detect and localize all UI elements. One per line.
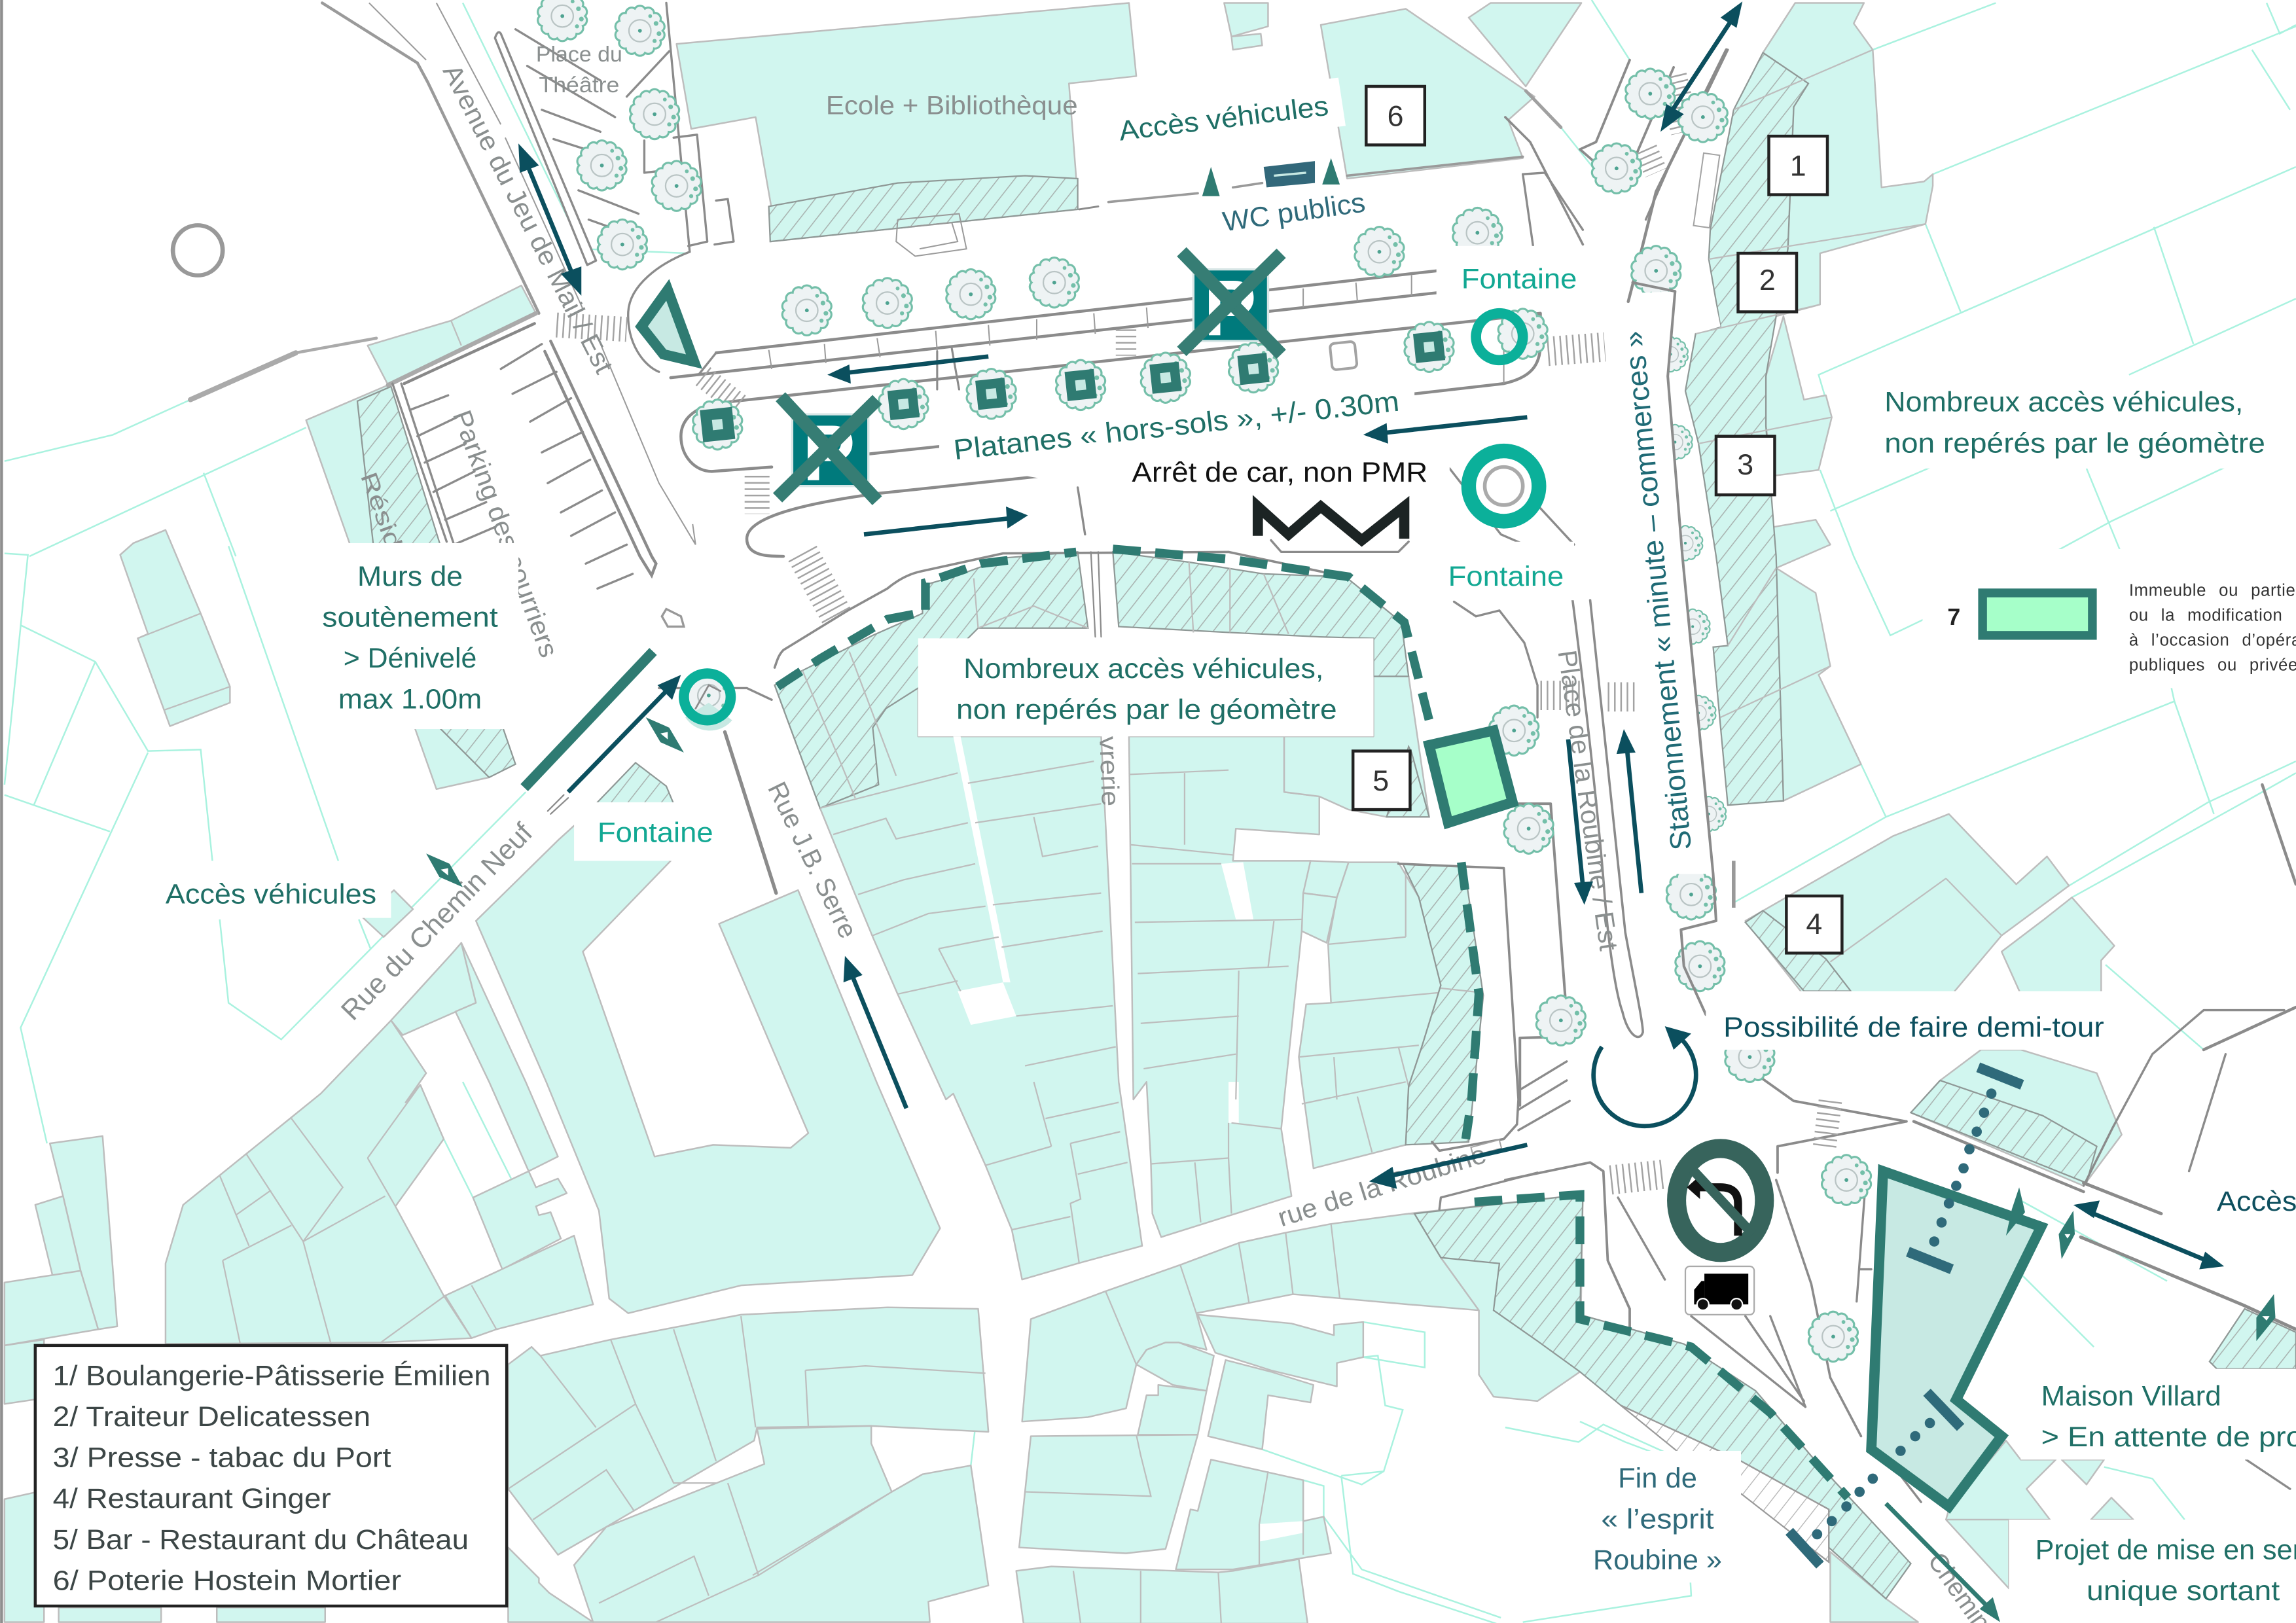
label: fin de l'esprit Roubine — [1593, 1463, 1722, 1576]
label: platanes: Platanes « hors-sols », +/- 0.30m — [952, 386, 1401, 466]
label: maison villard: Maison Villard — [2041, 1382, 2221, 1412]
label: WC publics: WC publics — [1221, 187, 1367, 238]
label: fontaine north: Fontaine — [1462, 264, 1577, 295]
label: fontaine centre: Fontaine — [1448, 562, 1564, 592]
buildings: north block — [368, 3, 1581, 385]
bus stop zigzag — [1258, 507, 1404, 540]
label: nombreux accès centre: Nombreux accès véhicules, — [963, 654, 1323, 685]
label: nombreux accès centre — [956, 654, 1337, 725]
immeuble 5 marker — [1429, 730, 1513, 823]
label: nombreux accès centre: non repérés par le géomètre — [956, 694, 1337, 725]
label: accès véhicules north: Accès véhicules — [1117, 91, 1330, 147]
no left turn sign with truck panel — [1665, 1136, 1776, 1315]
legend: commerces: 1/ Boulangerie-Pâtisserie Émilien — [53, 1361, 491, 1391]
street names: rue de la Roubine — [1274, 1139, 1490, 1232]
street names: Place de la Roubine / Est — [1552, 648, 1623, 952]
label: nombreux accès east: non repérés par le géomètre — [1884, 428, 2265, 459]
label: fin de l'esprit Roubine: Roubine » — [1593, 1545, 1722, 1576]
number badge 6 — [1366, 86, 1425, 145]
label: fin de l'esprit Roubine: « l’esprit — [1601, 1504, 1714, 1535]
label: fontaine west: Fontaine — [598, 817, 713, 848]
legend: commerces: 6/ Poterie Hostein Mortier — [53, 1565, 401, 1596]
retaining wall — [524, 651, 653, 788]
street names — [336, 43, 1997, 1623]
number badge 2 — [1738, 253, 1797, 312]
number badge 5: 5 — [1372, 764, 1389, 797]
buildings: south of rue de la Roubine — [1016, 1050, 2296, 1623]
number badge 5 — [1353, 751, 1410, 810]
trees — [538, 0, 1871, 1362]
parking sign north, crossed out: P — [1204, 264, 1257, 352]
legend: commerces: 4/ Restaurant Ginger — [53, 1484, 331, 1514]
planter squares — [700, 331, 1445, 442]
legend item 7: 7 — [1947, 604, 1960, 630]
label: murs de soutènement: max 1.00m — [338, 685, 482, 715]
western shield shape — [641, 290, 694, 362]
label: murs de soutènement — [322, 562, 498, 715]
legend: commerces — [35, 1346, 507, 1606]
number badge 2: 2 — [1759, 264, 1776, 296]
fountain rings — [684, 313, 1539, 730]
label: accès véhicules west: Accès véhicules — [166, 879, 376, 910]
street names: Rue J.B. Serre — [762, 777, 863, 943]
number badge 1 — [1769, 136, 1827, 195]
label: murs de soutènement: > Dénivelé — [344, 643, 476, 674]
street names: Ecole + Bibliothèque — [826, 90, 1078, 120]
label: projet de mise en sens unique: unique sortant — [2087, 1576, 2280, 1607]
WC block — [1264, 161, 1315, 187]
parking sign south, crossed out: P — [802, 409, 855, 497]
street names: vrerie — [1094, 736, 1124, 807]
street names: Rue du Chemin Neuf — [336, 817, 539, 1026]
label: fin de l'esprit Roubine: Fin de — [1618, 1463, 1697, 1494]
label: arrêt de car: Arrêt de car, non PMR — [1132, 457, 1427, 488]
number badge 3 — [1716, 437, 1774, 495]
label: nombreux accès east: Nombreux accès véhicules, — [1884, 387, 2243, 418]
number badge 1: 1 — [1790, 149, 1806, 182]
buildings: west — [5, 385, 988, 1622]
legend: commerces: 3/ Presse - tabac du Port — [53, 1443, 391, 1474]
buildings: central blocks — [775, 552, 1483, 1279]
street names: Parking des courriers — [447, 406, 564, 661]
label: projet de mise en sens unique — [2036, 1535, 2296, 1607]
legend item 7 — [1947, 581, 2296, 675]
buildings: east strip — [1685, 3, 2114, 1010]
parking sign south, crossed out — [778, 397, 877, 501]
number badge 6: 6 — [1388, 99, 1404, 132]
dotted section lines — [1789, 1067, 2022, 1565]
label: maison villard — [2041, 1382, 2296, 1453]
number badge 4: 4 — [1806, 908, 1822, 940]
street names: Avenue du Jeu de Mail / Est — [437, 60, 619, 378]
label: demi-tour: Possibilité de faire demi-tour — [1723, 1012, 2104, 1043]
street names: Théâtre — [539, 73, 619, 98]
number badge 3: 3 — [1737, 448, 1753, 481]
label: murs de soutènement: soutènement — [322, 602, 498, 633]
legend: commerces: 2/ Traiteur Delicatessen — [53, 1402, 370, 1433]
parking sign north, crossed out — [1181, 252, 1282, 354]
kerb masking half trees along east pavement — [1632, 283, 1716, 1014]
street names: Place du — [536, 43, 622, 67]
Maison Villard footprint — [1871, 1171, 2041, 1507]
label: murs de soutènement: Murs de — [357, 562, 463, 592]
label: nombreux accès east — [1884, 387, 2265, 459]
number badge 4 — [1786, 896, 1842, 953]
legend: commerces: 5/ Bar - Restaurant du Château — [53, 1525, 469, 1556]
street names: Résidence — [355, 469, 430, 615]
dashed frontage lines — [778, 549, 1848, 1498]
label: stationnement minute: Stationnement « minute – commerces » — [1617, 330, 1698, 851]
